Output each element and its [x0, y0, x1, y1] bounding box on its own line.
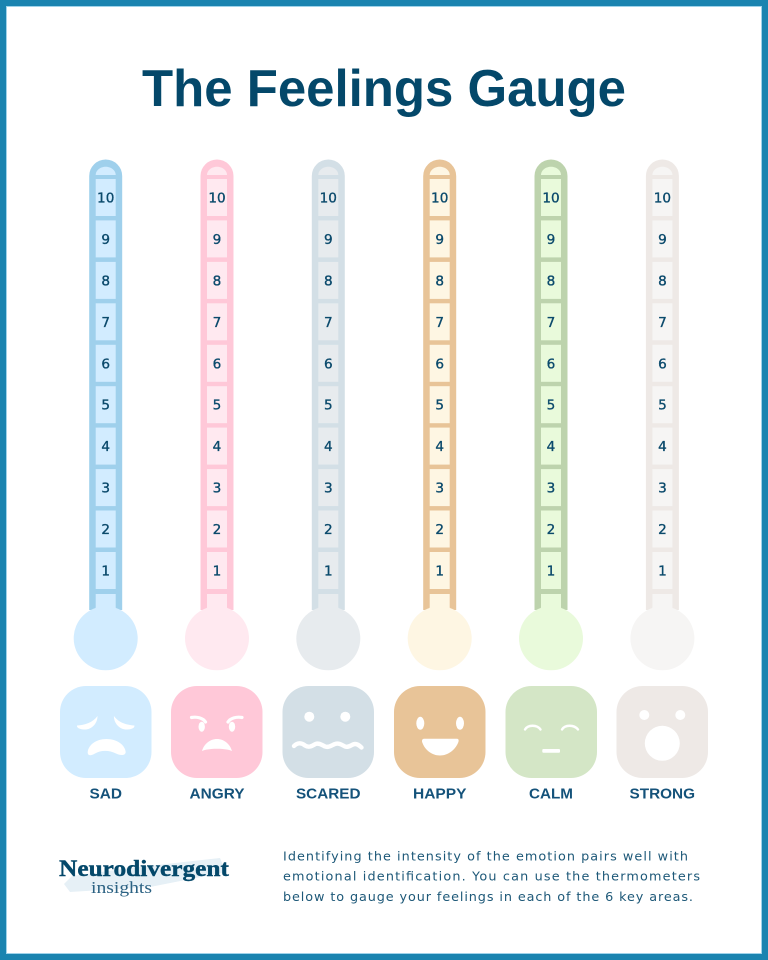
thermometer: scared: 8 [324, 273, 333, 289]
label: calm: CALM [529, 786, 573, 802]
thermometer: happy: 2 [435, 522, 444, 538]
thermometer: calm: 9 [547, 232, 555, 248]
thermometer: calm: 2 [547, 522, 555, 538]
thermometer: strong: 7 [658, 315, 667, 331]
thermometer: strong [630, 160, 694, 670]
thermometer: happy: 6 [435, 356, 444, 372]
thermometer: sad: 1 [101, 564, 110, 580]
thermometer: sad: 9 [101, 232, 110, 248]
thermometer: scared [296, 160, 360, 670]
thermometer: sad: 8 [101, 273, 110, 289]
logo: Neurodivergent insights [59, 856, 229, 897]
thermometer: happy: 8 [435, 273, 444, 289]
logo: Neurodivergent insights: insights [91, 878, 152, 897]
description text: below to gauge your feelings in each of the 6 key areas. [283, 890, 693, 905]
thermometer: angry: 5 [213, 398, 221, 414]
thermometer: calm: 6 [547, 356, 555, 372]
thermometer: calm [519, 160, 583, 670]
thermometer: calm: 3 [547, 481, 555, 497]
thermometer: angry: 3 [213, 481, 221, 497]
thermometer: sad: 7 [101, 315, 110, 331]
thermometer: strong: 3 [658, 481, 667, 497]
thermometer: strong: 9 [658, 232, 667, 248]
thermometer: calm: 4 [547, 439, 555, 455]
label: sad: SAD [90, 786, 122, 802]
thermometer: scared: 10 [320, 190, 337, 206]
thermometer: sad: 10 [97, 190, 114, 206]
thermometer: scared: 9 [324, 232, 333, 248]
thermometer: happy: 1 [435, 564, 444, 580]
thermometer: angry: 10 [208, 190, 226, 206]
thermometer: happy: 4 [435, 439, 444, 455]
description text [283, 850, 700, 905]
icon: scared face [282, 686, 374, 778]
thermometer: scared: 1 [324, 564, 333, 580]
thermometer: scared: 6 [324, 356, 333, 372]
thermometer: angry: 8 [213, 273, 221, 289]
thermometer: angry: 4 [213, 439, 221, 455]
thermometer: calm: 1 [547, 564, 555, 580]
icon: sad face [60, 686, 152, 778]
thermometer: calm: 8 [547, 273, 555, 289]
thermometer: angry: 2 [213, 522, 221, 538]
icon: strong face [616, 686, 708, 778]
thermometer: sad: 4 [101, 439, 110, 455]
thermometer: calm: 7 [547, 315, 555, 331]
thermometer: strong: 2 [658, 522, 667, 538]
thermometer: angry [185, 160, 249, 670]
thermometer: sad: 2 [101, 522, 110, 538]
thermometer: sad: 3 [101, 481, 110, 497]
thermometer: happy [408, 160, 472, 670]
logo: Neurodivergent insights: Neurodivergent [59, 856, 229, 881]
description text: emotional identification. You can use the thermometers [283, 870, 700, 885]
thermometer: strong: 6 [658, 356, 667, 372]
thermometer: scared: 5 [324, 398, 333, 414]
thermometer: happy: 3 [435, 481, 444, 497]
thermometer: happy: 7 [435, 315, 444, 331]
thermometer: happy: 5 [435, 398, 444, 414]
thermometer: scared: 7 [324, 315, 333, 331]
thermometer: strong: 5 [658, 398, 667, 414]
label: scared: SCARED [296, 786, 360, 802]
thermometer: happy: 10 [431, 190, 448, 206]
thermometer: angry: 6 [213, 356, 221, 372]
thermometer: happy: 9 [435, 232, 444, 248]
icon: calm face [506, 686, 597, 778]
label: happy: HAPPY [413, 786, 467, 802]
thermometer: scared: 4 [324, 439, 333, 455]
title: The Feelings Gauge [142, 60, 626, 118]
thermometer: strong: 8 [658, 273, 667, 289]
label: angry: ANGRY [190, 786, 245, 802]
thermometer: angry: 1 [213, 564, 221, 580]
thermometer: calm: 10 [542, 190, 560, 206]
thermometer: angry: 7 [213, 315, 221, 331]
thermometer: strong: 10 [654, 190, 671, 206]
thermometer: angry: 9 [213, 232, 221, 248]
thermometer: sad: 5 [101, 398, 110, 414]
thermometer: strong: 4 [658, 439, 667, 455]
thermometer: sad: 6 [101, 356, 110, 372]
thermometer: calm: 5 [547, 398, 555, 414]
thermometer: sad [74, 160, 138, 670]
icon: angry face [171, 686, 262, 778]
icon: happy face [394, 686, 486, 778]
thermometer: strong: 1 [658, 564, 667, 580]
label: strong: STRONG [630, 786, 695, 802]
description text: Identifying the intensity of the emotion pairs well with [283, 850, 688, 864]
thermometer: scared: 2 [324, 522, 333, 538]
thermometer: scared: 3 [324, 481, 333, 497]
